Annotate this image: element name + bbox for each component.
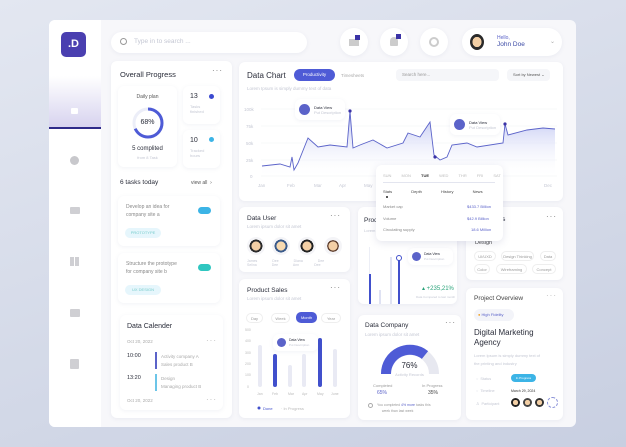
panel: product: Data View xyxy=(424,252,440,256)
panel: categories: dolor sit amet xyxy=(474,226,501,231)
panel: product sales: Day xyxy=(251,316,258,321)
task 2: Structure the prototype xyxy=(126,261,177,267)
panel: categories: UI/UXD xyxy=(478,254,492,259)
daily plan: Daily plan xyxy=(137,94,158,100)
panel: product: Lorem xyxy=(364,228,375,233)
panel: product sales: 500 xyxy=(245,328,251,332)
panel: data company xyxy=(358,315,461,420)
tooltip: data view 1 xyxy=(295,99,345,120)
main container xyxy=(49,20,576,427)
data calender: Sales product B xyxy=(161,362,193,367)
panel: categories: ··· xyxy=(546,212,557,221)
line chart xyxy=(244,107,555,188)
panel: product: Produ xyxy=(364,217,381,224)
panel: data chart: Timesheets xyxy=(341,73,364,78)
panel: data chart: Lorem Ipsum is simply dummy text of data xyxy=(247,86,331,91)
popup: stats tooltip: SUN MON TUE WED THR FRI SAT xyxy=(383,173,501,178)
panel: data chart: Search here... xyxy=(402,72,430,77)
daily plan: 68% xyxy=(140,119,154,126)
data calender: ··· xyxy=(206,395,217,404)
panel: product sales: 300 xyxy=(245,351,251,355)
nav icons xyxy=(70,156,79,165)
data calender xyxy=(120,315,223,410)
panel: project overview: March 29, 2024 xyxy=(511,389,535,393)
panel: product sales: Year xyxy=(327,316,335,321)
task 1 xyxy=(118,196,220,246)
panel: data company: Lorem ipsum dolor sit amet xyxy=(365,332,419,337)
panel: product sales: Lorem ipsum dolor sit amet xyxy=(247,296,301,301)
data calender: Oct 20, 2022 xyxy=(127,398,153,403)
popup: stats tooltip: $433.7 Billion xyxy=(467,204,491,209)
popup: stats tooltip xyxy=(376,165,503,241)
data calender: 10:00 xyxy=(127,353,141,359)
panel: data company: Completed xyxy=(373,383,392,388)
line chart: Mar xyxy=(314,183,322,188)
panel: product sales: Product Sales xyxy=(247,287,287,294)
panel: product: ▴ +235,21% xyxy=(422,286,454,292)
panel: data company: Data Company xyxy=(365,322,408,329)
panel: product sales: 400 xyxy=(245,339,251,343)
search bar: Type in to search ... xyxy=(134,38,191,45)
line chart: Feb xyxy=(287,183,295,188)
panel: overall progress: Overall Progress xyxy=(120,70,176,79)
tasks finished xyxy=(183,86,220,124)
line chart: Nov xyxy=(489,183,498,188)
popup: stats tooltip: Volume xyxy=(383,216,396,221)
tasks finished: finished xyxy=(190,109,204,114)
panel: product: Put Description xyxy=(424,257,444,261)
task 2: UX DESIGN xyxy=(132,287,154,292)
tooltip: data view 2: Data View xyxy=(469,120,487,125)
panel: product sales: Jan xyxy=(257,392,263,396)
panel: data company: Activity Records xyxy=(395,372,424,377)
header icons xyxy=(340,28,368,56)
panel: product sales: Apr xyxy=(302,392,308,396)
popup: stats tooltip: 18.6 Million xyxy=(471,227,491,232)
task 2 xyxy=(118,253,220,303)
panel: product sales: Put Description xyxy=(289,343,309,347)
search bar xyxy=(111,32,307,53)
line chart: 0 xyxy=(250,174,253,179)
panel: product sales xyxy=(239,279,350,418)
panel: data company: 76% xyxy=(401,361,418,370)
tooltip: data view 2: Put Description xyxy=(469,125,496,130)
avatars xyxy=(247,237,342,267)
panel: product sales: Mar xyxy=(288,392,295,396)
tooltip: data view 1: Put Description xyxy=(314,110,341,115)
data calender: Data Calender xyxy=(127,323,172,330)
data calender: Design xyxy=(161,376,175,381)
panel: project overview: In Progress xyxy=(516,376,531,380)
panel: categories: Data xyxy=(544,254,552,259)
panel: overall progress: ··· xyxy=(212,66,223,75)
panel: categories: Design Thinking xyxy=(503,254,532,259)
line chart: May xyxy=(364,183,373,188)
panel: categories: Color xyxy=(477,267,487,272)
panel: data company: 65% xyxy=(377,390,387,396)
panel: product sales: 0 xyxy=(247,385,249,389)
panel: data user: ··· xyxy=(330,211,341,220)
panel: categories: Categories xyxy=(474,216,505,223)
sidebar xyxy=(49,20,101,427)
line chart: 25k xyxy=(246,158,254,163)
logo: .D xyxy=(68,38,79,50)
panel: data company: You completed 4% more tasks this xyxy=(377,403,431,407)
panel: project overview: Lorem Ipsum is simply dummy text of xyxy=(474,353,540,358)
task 2: for company site b xyxy=(126,269,167,275)
nav: home active xyxy=(49,76,101,129)
panel: overall progress: view all › xyxy=(191,180,212,186)
data calender: 13:20 xyxy=(127,375,141,381)
panel: categories: Concept xyxy=(537,267,551,272)
panel: categories: Design xyxy=(475,240,492,246)
panel: product sales: Done xyxy=(263,406,273,411)
panel: data chart: Productivity xyxy=(303,72,326,77)
panel: project overview: the printing and industry xyxy=(474,361,517,366)
panel: categories: Wireframing xyxy=(501,267,522,272)
line chart: Jan xyxy=(258,183,266,188)
daily plan: 5 complited xyxy=(132,146,163,152)
panel: product: Data Compared to last month xyxy=(416,295,455,299)
panel: project overview xyxy=(466,288,563,420)
daily plan: from 8 Task xyxy=(137,155,158,160)
tooltip: data view 1: Data View xyxy=(314,105,332,110)
panel: product sales: ··· xyxy=(330,283,341,292)
task 1: company site a xyxy=(126,212,160,218)
panel: project overview: ◌ Status xyxy=(476,377,491,381)
logo xyxy=(61,32,86,57)
tracked hours: hours xyxy=(190,153,200,158)
tasks finished: Tasks xyxy=(190,104,200,109)
popup: stats tooltip: Circulating supply xyxy=(383,227,415,232)
gauge xyxy=(381,344,439,374)
panel: data company: 35% xyxy=(428,390,438,396)
panel: categories xyxy=(466,207,563,280)
panel: product sales: 200 xyxy=(245,362,251,366)
panel: data chart: Sort by Newest ⌄ xyxy=(513,72,545,77)
line chart: 50k xyxy=(246,141,254,146)
panel: product sales: Week xyxy=(275,316,286,321)
panel: data company: ··· xyxy=(445,318,456,327)
panel: overall progress xyxy=(111,61,232,418)
avatars: James Dee Diana Dee Selina Dee Ann Dee xyxy=(247,259,324,267)
panel: product xyxy=(358,207,457,304)
panel: product sales: May xyxy=(317,392,324,396)
tooltip: data view 2 xyxy=(450,114,500,135)
line chart: Dec xyxy=(544,183,553,188)
panel: project overview: ♙ Participant xyxy=(476,402,499,406)
popup: stats tooltip: Market cap xyxy=(383,204,403,209)
panel: data chart: Data Chart xyxy=(247,71,286,80)
user card xyxy=(462,28,562,56)
popup: stats tooltip: $42.9 Billion xyxy=(467,216,489,221)
panel: data user: Lorem ipsum dolor sit amet xyxy=(247,224,301,229)
popup: stats tooltip: Stats Depth History News xyxy=(383,189,483,194)
panel: data user: Data User xyxy=(247,215,276,222)
panel: data chart xyxy=(239,62,563,201)
panel: data user xyxy=(239,207,350,272)
tracked hours: 10 xyxy=(190,137,198,144)
panel: data company: week than last week xyxy=(382,409,413,413)
panel: project overview: ··· xyxy=(546,291,557,300)
panel: product sales: June xyxy=(331,392,339,396)
panel: overall progress: 6 tasks today xyxy=(120,179,158,186)
panel: project overview: Project Overview xyxy=(474,295,523,302)
panel: product sales: 100 xyxy=(245,373,251,377)
line chart: 100k xyxy=(244,107,255,112)
user card: John Doe xyxy=(497,41,525,48)
tasks finished: 13 xyxy=(190,93,198,100)
user card: ⌄ xyxy=(550,39,555,45)
tracked hours: Tracked xyxy=(190,148,204,153)
panel: data company: In Progress xyxy=(422,383,442,388)
panel: product sales: · In Progress xyxy=(281,406,304,411)
panel: product sales: Month xyxy=(301,315,312,320)
daily plan xyxy=(118,86,177,167)
panel: project overview: ◌ Timeline xyxy=(476,389,495,393)
tracked hours xyxy=(183,130,220,168)
task 1: PROTOTYPE xyxy=(131,230,155,235)
line chart: 75k xyxy=(246,124,254,129)
panel: project overview: Digital Marketing xyxy=(474,328,534,337)
data calender: Oct 20, 2022 xyxy=(127,339,153,344)
panel: product sales: Feb xyxy=(272,392,278,396)
data calender: Activity company A xyxy=(161,354,199,359)
data calender: ··· xyxy=(206,336,217,345)
data calender: Managing product B xyxy=(161,384,201,389)
panel: project overview: ● High Fidelity xyxy=(478,312,504,317)
user card: Hello, xyxy=(497,35,510,41)
panel: product sales: Data View xyxy=(289,338,305,342)
task 1: Develop an idea for xyxy=(126,204,169,210)
panel: project overview: Agency xyxy=(474,338,501,347)
line chart: Apr xyxy=(339,183,347,188)
